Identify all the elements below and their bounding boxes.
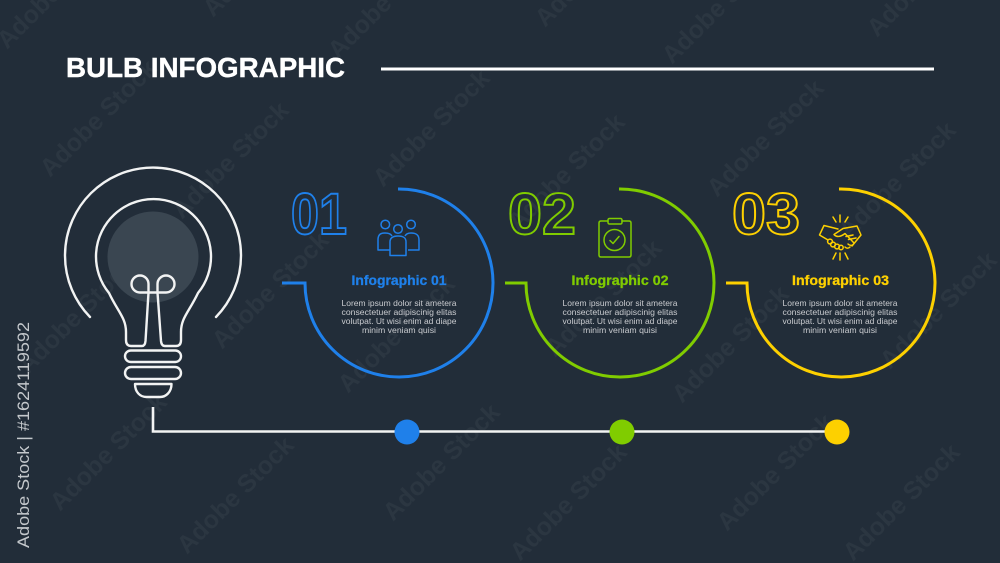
text: Adobe Stock: [666, 280, 794, 408]
number 01: 01: [291, 182, 347, 247]
icon: light bulb: [65, 168, 241, 397]
body text 03: minim veniam quisi: [803, 325, 877, 335]
body text 01: volutpat. Ut wisi enim ad diape: [342, 316, 457, 326]
icon: people: [378, 220, 419, 256]
text: Adobe Stock: [539, 234, 667, 362]
timeline connector: [153, 407, 837, 432]
timeline dot yellow: [824, 420, 850, 444]
title: BULB INFOGRAPHIC: [66, 52, 345, 83]
body text 01: minim veniam quisi: [362, 325, 436, 335]
panel: infographic 01: [282, 182, 493, 377]
body text 03: consectetuer adipiscinig elitas: [782, 307, 898, 317]
text: Adobe Stock: [34, 54, 162, 182]
panel: infographic 02: [505, 182, 714, 377]
heading 02: Infographic 02: [572, 272, 669, 288]
number 02: 02: [508, 182, 576, 247]
body text 03: volutpat. Ut wisi enim ad diape: [782, 316, 898, 326]
body text 01: Lorem ipsum dolor sit ametera: [342, 298, 457, 308]
text: Adobe Stock: [377, 398, 505, 526]
title rule: [381, 68, 934, 70]
heading 03: Infographic 03: [792, 272, 889, 288]
text: Adobe Stock: [367, 64, 495, 192]
vertical stock credit: Adobe Stock | #1624119592: [14, 322, 33, 548]
text: Adobe Stock: [711, 408, 839, 536]
ring 03: [726, 189, 935, 377]
text: Adobe Stock: [44, 388, 172, 516]
body text 02: Lorem ipsum dolor sit ametera: [562, 298, 678, 308]
body text 02: consectetuer adipiscinig elitas: [562, 307, 678, 317]
number 03: 03: [732, 182, 800, 247]
panel: infographic 03: [726, 182, 935, 377]
text: Adobe Stock: [171, 431, 299, 559]
text: Adobe Stock: [504, 438, 632, 563]
text: Adobe Stock: [833, 116, 961, 244]
body text 02: volutpat. Ut wisi enim ad diape: [562, 316, 678, 326]
text: Adobe Stock: [166, 96, 294, 224]
ring 01: [282, 189, 493, 377]
timeline dot blue: [394, 420, 420, 444]
text: Adobe Stock: [502, 108, 630, 236]
ring 02: [505, 189, 714, 377]
body text 02: [562, 298, 678, 335]
text: Adobe Stock: [12, 251, 140, 379]
body text 03: Lorem ipsum dolor sit ametera: [782, 298, 898, 308]
body text 03: [782, 298, 898, 335]
body text 02: minim veniam quisi: [583, 325, 657, 335]
icon: clipboard: [599, 218, 631, 257]
text: Adobe Stock: [701, 74, 829, 202]
timeline dot green: [610, 420, 634, 444]
icon: handshake: [820, 215, 861, 260]
text: Adobe Stock: [874, 246, 1000, 374]
body text 01: [342, 298, 457, 335]
body text 01: consectetuer adipiscinig elitas: [342, 307, 456, 317]
text: Adobe Stock: [837, 438, 965, 563]
text: Adobe Stock: [206, 226, 334, 354]
heading 01: Infographic 01: [352, 272, 447, 288]
text: Adobe Stock: [332, 270, 460, 398]
